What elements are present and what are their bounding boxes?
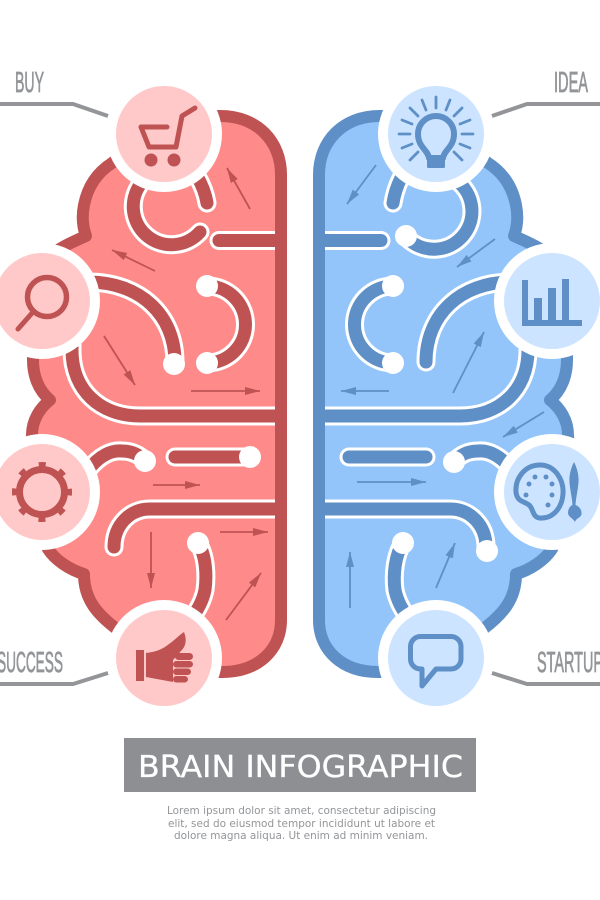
arrow: [191, 390, 260, 392]
left tract: arc from gear icon: [88, 450, 156, 472]
arrow: [341, 390, 389, 392]
arrow: [153, 484, 200, 486]
right tract: long central path: [325, 340, 528, 416]
icon: speech bubble: [378, 600, 494, 716]
label: STARTUP: [492, 647, 600, 684]
left tract: lower curve with dot: [187, 532, 209, 620]
body text: [167, 805, 436, 842]
icon: paint palette and brush: [494, 434, 600, 550]
title: [124, 738, 476, 792]
left tract: upper C curve: [133, 176, 207, 245]
right tract: lower curve with dot: [392, 532, 414, 620]
body text: dolore magna aliqua. Ut enim ad minim veniam.: [174, 830, 428, 842]
panel: right brain hemisphere: [319, 116, 570, 672]
icon: light bulb: [378, 76, 494, 192]
arrow: [226, 573, 261, 620]
label: SUCCESS: SUCCESS: [0, 647, 63, 679]
left tract: reversed C with two dots: [196, 275, 245, 374]
left tract: long central path: [72, 340, 275, 416]
arrow: [453, 332, 484, 393]
arrow: [227, 168, 250, 209]
left tract: upper bar: [219, 231, 275, 250]
label: BUY: [0, 67, 108, 116]
right hemisphere midline wall: [313, 175, 325, 620]
arrow: [104, 336, 135, 385]
right tract: upper bar: [325, 231, 381, 250]
arrow: [436, 543, 455, 588]
arrow: [503, 412, 544, 437]
right hemisphere outline: [319, 116, 570, 672]
label: IDEA: [492, 67, 600, 116]
right tract: C with two dots: [354, 275, 404, 374]
label: BUY: BUY: [15, 67, 44, 99]
arrow: [457, 239, 495, 267]
right tract: lower path with dot: [325, 509, 498, 562]
left tract: lower path: [114, 509, 275, 547]
left hemisphere outline: [30, 116, 281, 672]
icon: gear: [0, 434, 100, 550]
icon: bar chart: [494, 243, 600, 359]
left hemisphere midline wall: [275, 175, 287, 620]
icon: shopping cart: [106, 76, 222, 192]
arrow: [349, 552, 351, 608]
panel: left brain hemisphere: [30, 116, 281, 672]
right tract: middle bar: [349, 448, 426, 466]
arrow: [112, 250, 155, 271]
right tract: arc to chart icon: [426, 282, 512, 362]
right tract: upper C curve: [393, 178, 472, 249]
arrow: [357, 481, 426, 483]
left tract: middle bar with dot: [175, 446, 261, 468]
icon: thumbs up: [106, 600, 222, 716]
arrow: [220, 531, 268, 533]
arrow: [150, 532, 152, 588]
body text: Lorem ipsum dolor sit amet, consectetur adipiscing: [167, 805, 436, 817]
title: BRAIN INFOGRAPHIC: [138, 750, 463, 785]
right tract: arc from palette icon: [443, 451, 512, 473]
left tract: arc from search icon: [88, 282, 185, 375]
arrow: [347, 165, 376, 204]
body text: elit, sed do eiusmod tempor incididunt ut labore et: [168, 818, 435, 830]
icon: magnifying glass: [0, 243, 100, 359]
